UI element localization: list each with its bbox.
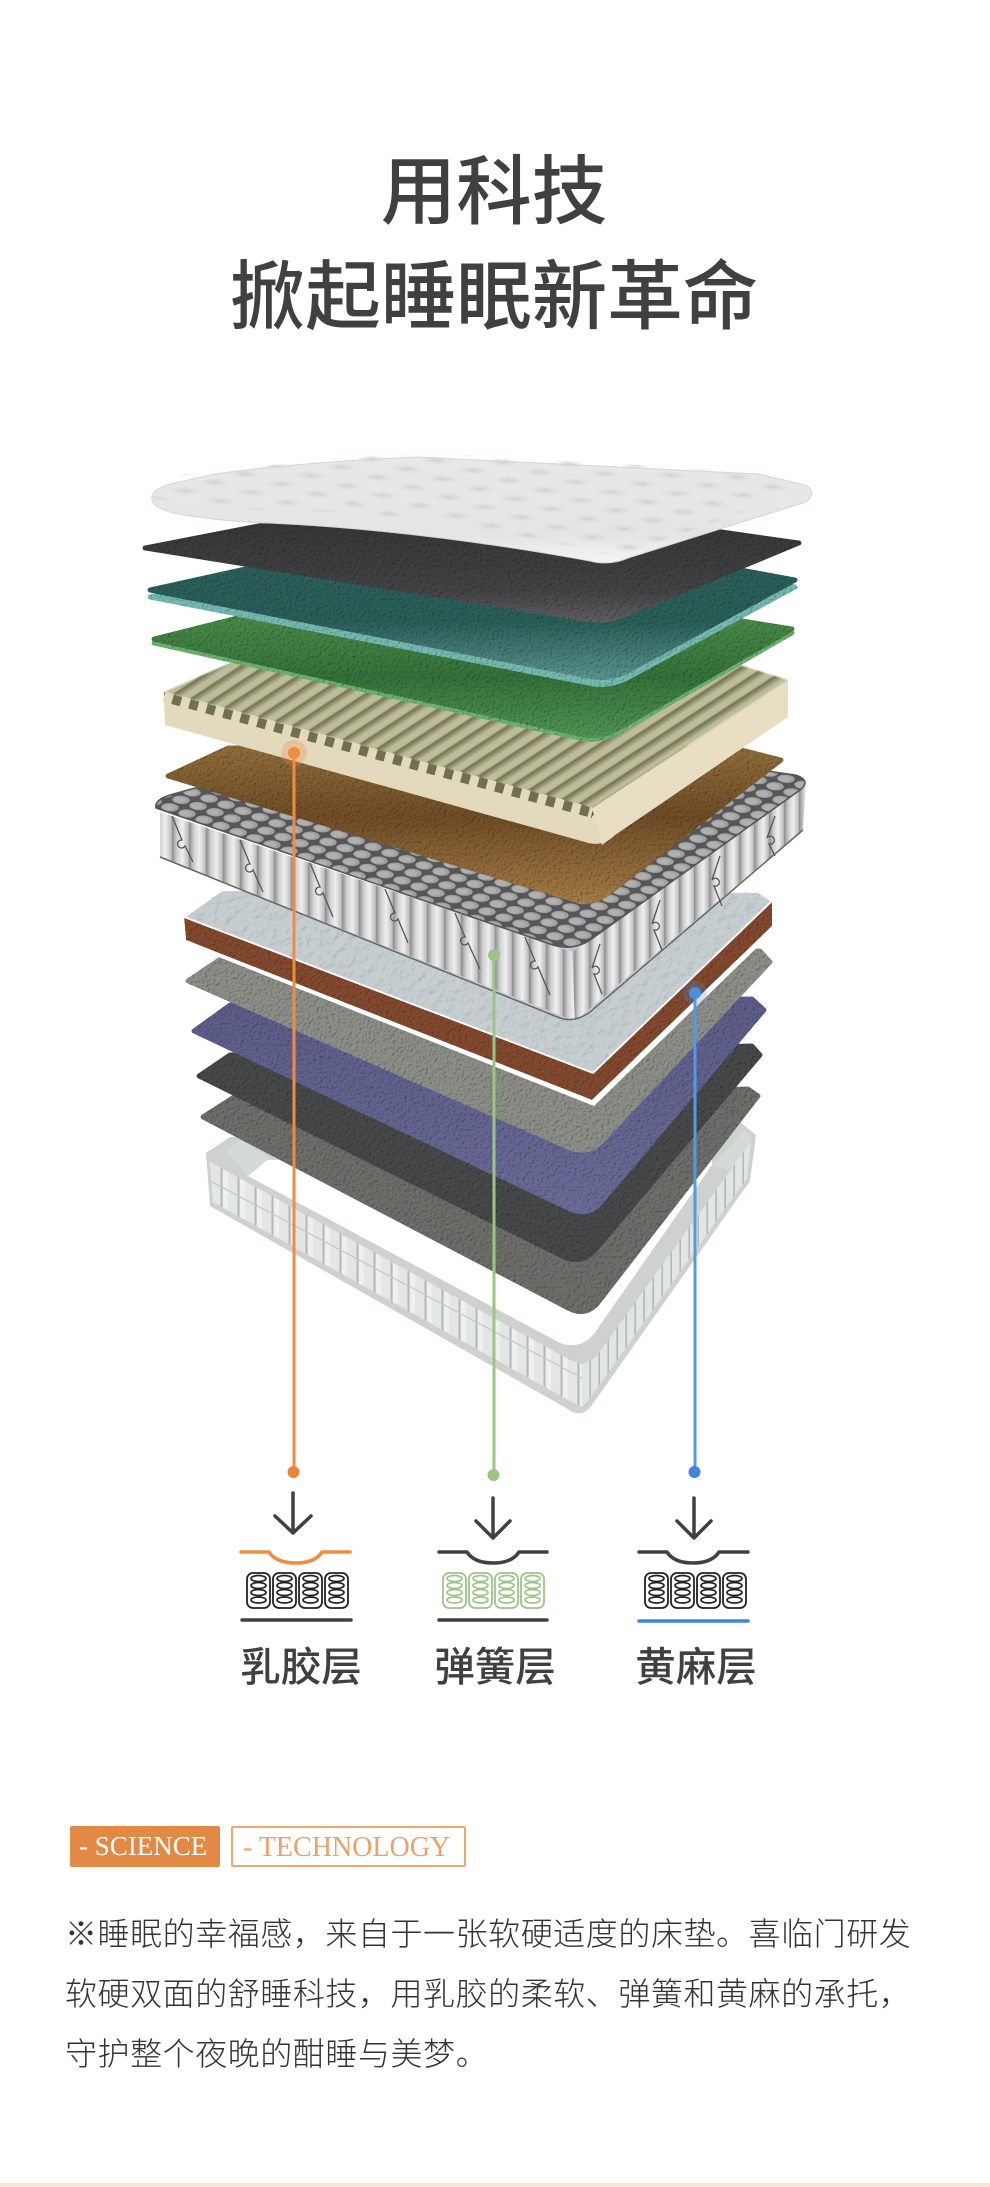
title: 用科技 [381, 150, 607, 234]
icon: coir layer pressure [639, 1498, 748, 1621]
tag: science [70, 1826, 220, 1867]
layer: green foam [154, 618, 792, 740]
layer: purple foam [194, 999, 764, 1212]
layer: brown felt [168, 748, 781, 901]
label: latex: 乳胶层 [240, 1644, 362, 1690]
layer: lower grey felt [203, 1089, 758, 1312]
layer: ribbed latex (乳胶) [164, 660, 788, 845]
layer: teal foam [150, 565, 795, 685]
callout: spring pointer [488, 949, 500, 1481]
layer: dark felt [199, 1046, 760, 1260]
callout: coir pointer [683, 981, 707, 1478]
body text: 软硬双面的舒睡科技，用乳胶的柔软、弹簧和黄麻的承托， [65, 1976, 911, 2012]
body text: 守护整个夜晚的酣睡与美梦。 [65, 2036, 488, 2072]
layer: grey fabric [188, 951, 770, 1150]
tag: technology: - TECHNOLOGY [243, 1832, 450, 1863]
label: coir: 黄麻层 [635, 1644, 757, 1690]
icon: latex layer pressure [241, 1493, 351, 1620]
body text: ※睡眠的幸福感，来自于一张软硬适度的床垫。喜临门研发 [65, 1916, 911, 1952]
callout: latex pointer [281, 740, 307, 1478]
tag: science: - SCIENCE [79, 1831, 207, 1861]
mattress exploded illustration [142, 453, 812, 1623]
body text [65, 1916, 911, 2072]
icon: spring layer pressure [439, 1498, 547, 1620]
label: spring: 弹簧层 [434, 1644, 556, 1690]
tag: technology [231, 1826, 466, 1867]
layer: bottom quilted frame [206, 1122, 756, 1413]
layer: coir board (黄麻) [184, 890, 775, 1106]
bottom strip [0, 2183, 990, 2187]
title: 掀起睡眠新革命 [230, 255, 758, 339]
layer: pocket spring unit [156, 770, 806, 1021]
layer: charcoal felt [145, 525, 799, 620]
layer: quilted top pillow [152, 452, 812, 563]
title [230, 150, 758, 339]
